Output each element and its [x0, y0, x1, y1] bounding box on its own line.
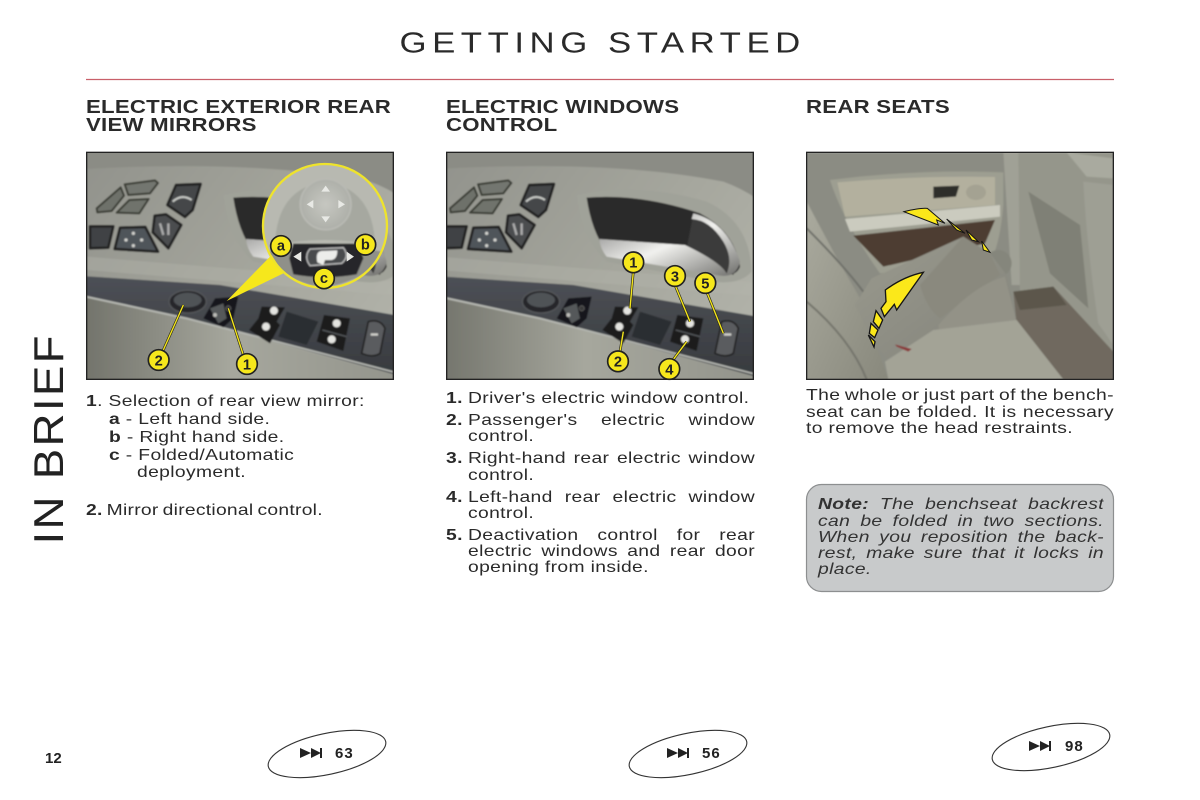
callout 4 — [659, 359, 680, 379]
window instructions: Right-hand rear electric window — [468, 450, 755, 467]
window instructions: electric windows and rear door — [468, 543, 755, 560]
rear seats description: to remove the head restraints. — [806, 420, 1073, 436]
reference oval 63 — [264, 721, 390, 787]
note text — [818, 496, 1104, 578]
column 2 heading: ELECTRIC WINDOWS — [446, 97, 679, 117]
arrow: upper fold — [904, 208, 990, 252]
reference oval 98 — [988, 714, 1114, 780]
callout 2 — [148, 350, 169, 370]
callout b — [355, 234, 376, 255]
note text: place. — [818, 561, 872, 578]
window instructions: 2. — [446, 412, 463, 429]
note text: Note: The benchseat backrest — [818, 496, 1104, 513]
window instructions: Passenger's electric window — [468, 412, 755, 429]
reference oval 98: 98 — [1065, 738, 1084, 755]
window instructions: control. — [468, 467, 534, 484]
mirror instructions: 2. Mirror directional control. — [86, 502, 323, 519]
window instructions: 5. — [446, 527, 463, 544]
callout 5 — [695, 273, 716, 293]
reference oval 56: 56 — [702, 745, 721, 762]
arrow: lower fold — [868, 272, 923, 347]
callout 1 — [623, 252, 644, 273]
callout 2: 2 — [155, 353, 163, 369]
callout 2 — [608, 351, 628, 372]
column 2 heading: CONTROL — [446, 115, 557, 135]
callout a: a — [277, 238, 286, 254]
mirror instructions: deployment. — [137, 464, 246, 481]
window instructions: 4. — [446, 489, 463, 506]
callout 5: 5 — [701, 276, 709, 292]
callout 2: 2 — [614, 355, 622, 371]
window instructions: Deactivation control for rear — [468, 527, 755, 544]
page number: 12 — [45, 750, 62, 767]
window instructions: 3. — [446, 450, 463, 467]
photo: mirror controls — [86, 152, 394, 380]
window instructions: Driver's electric window control. — [468, 390, 749, 407]
mirror instructions: 1. Selection of rear view mirror: — [86, 393, 365, 410]
note text: can be folded in two sections. — [818, 513, 1104, 530]
window instructions: 1. — [446, 390, 463, 407]
window instructions: control. — [468, 505, 534, 522]
callout lines — [163, 305, 243, 355]
window instructions — [446, 390, 755, 576]
rear seats description: seat can be folded. It is necessary — [806, 404, 1114, 420]
column 1 heading: ELECTRIC EXTERIOR REAR — [86, 97, 391, 117]
reference oval 56 — [625, 721, 751, 787]
reference oval 63: 63 — [335, 745, 354, 762]
magnifier rim — [263, 164, 387, 288]
rear seats description — [806, 387, 1114, 436]
mirror instructions: b - Right hand side. — [109, 429, 284, 446]
mirror instructions — [86, 393, 365, 519]
magnifier arrows — [293, 186, 354, 262]
photo: window controls — [446, 152, 754, 380]
callout 1: 1 — [243, 357, 251, 373]
column 1 heading — [86, 97, 391, 135]
callout 1: 1 — [629, 256, 637, 272]
callout lines — [620, 272, 723, 362]
note box — [806, 484, 1114, 592]
callout 3 — [665, 266, 685, 286]
column 2 heading — [446, 97, 679, 135]
callout 4: 4 — [665, 362, 674, 378]
window instructions: opening from inside. — [468, 559, 649, 576]
rear seats description: The whole or just part of the bench- — [806, 387, 1114, 404]
callout c: c — [320, 271, 328, 287]
callout c — [314, 268, 334, 289]
window instructions: Left-hand rear electric window — [468, 489, 755, 506]
page title: GETTING STARTED — [400, 26, 800, 59]
callout 1 — [237, 354, 257, 374]
note text: When you reposition the back- — [818, 529, 1104, 546]
mirror instructions: c - Folded/Automatic — [109, 447, 294, 464]
note text: rest, make sure that it locks in — [818, 545, 1104, 562]
callout 3: 3 — [671, 269, 679, 285]
column 3 heading: REAR SEATS — [806, 97, 950, 117]
callout b: b — [361, 238, 370, 254]
column 1 heading: VIEW MIRRORS — [86, 115, 257, 135]
mirror instructions: a - Left hand side. — [109, 411, 270, 428]
side label: in brief: IN BRIEF — [27, 335, 73, 544]
magnifier pointer — [227, 255, 283, 301]
photo: rear seats — [807, 152, 1113, 379]
callout a — [271, 236, 291, 256]
window instructions: control. — [468, 428, 534, 445]
